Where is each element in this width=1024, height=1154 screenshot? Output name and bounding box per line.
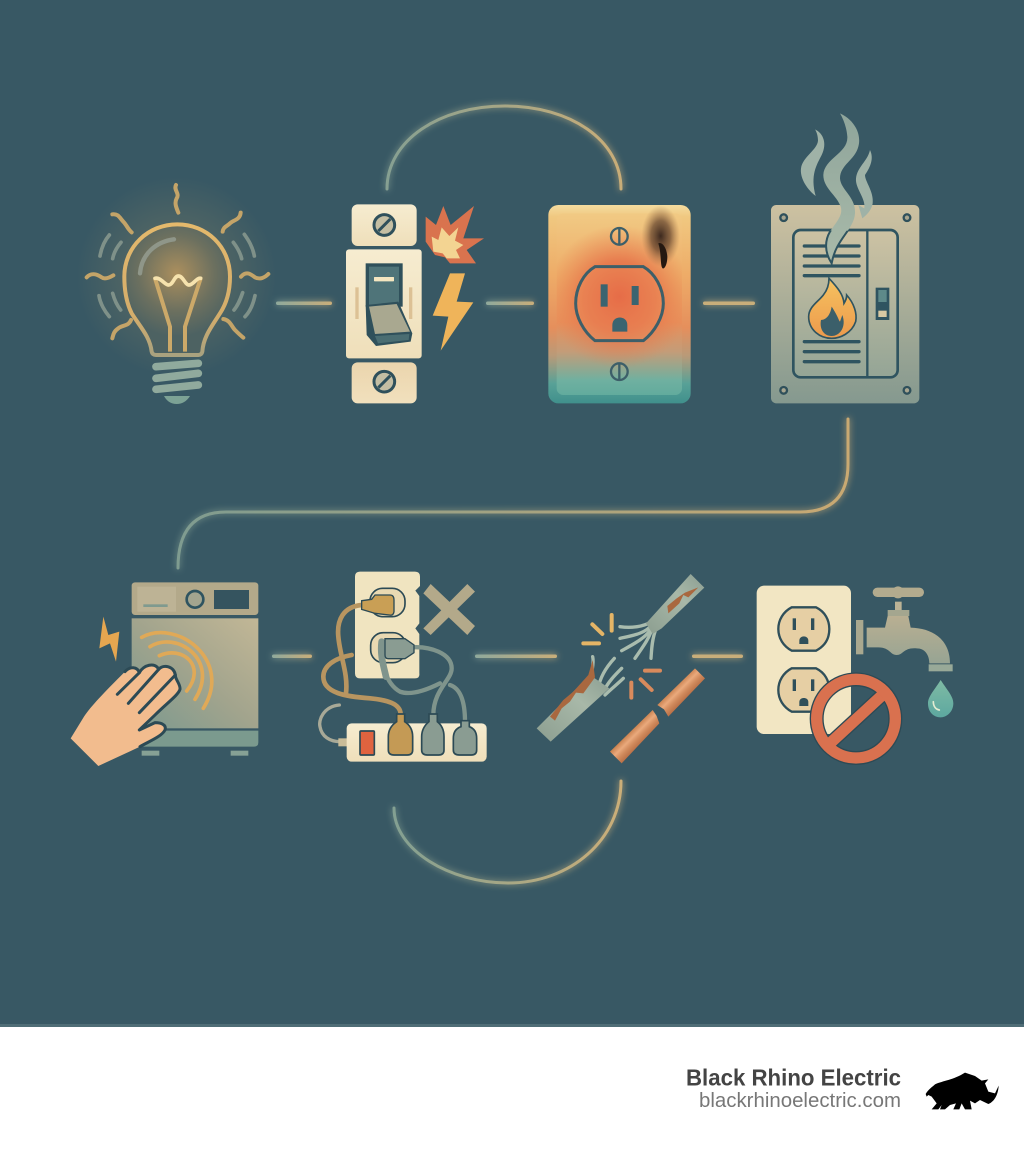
connector: top arc (387, 106, 621, 189)
icon: shocking washing machine and hand (71, 582, 258, 766)
icon: faulty light switch with spark (346, 204, 484, 403)
connector: bulb to switch (276, 302, 332, 305)
icon: scorched hot outlet (548, 205, 691, 403)
icon: flickering light bulb (77, 177, 277, 404)
footer band (0, 1026, 1024, 1154)
connector: power strip to wires (475, 654, 557, 658)
connector: outlet to panel (703, 302, 755, 305)
connector: S curve between rows (178, 419, 848, 568)
icon: black rhino logo (926, 1073, 999, 1109)
icon: outlet near water with prohibition sign (757, 586, 953, 758)
connector: switch to outlet (486, 302, 534, 305)
icon: burning breaker panel with smoke (771, 113, 919, 403)
connector: washer to power strip (272, 654, 312, 658)
icon: frayed and broken wires (537, 574, 705, 763)
footer: company name: Black Rhino Electric (686, 1064, 901, 1090)
connector: bottom arc (394, 781, 621, 883)
connector: wires to wet outlet (692, 654, 743, 658)
icon: overloaded outlet and power strip (320, 572, 487, 762)
footer: website: blackrhinoelectric.com (699, 1090, 901, 1112)
